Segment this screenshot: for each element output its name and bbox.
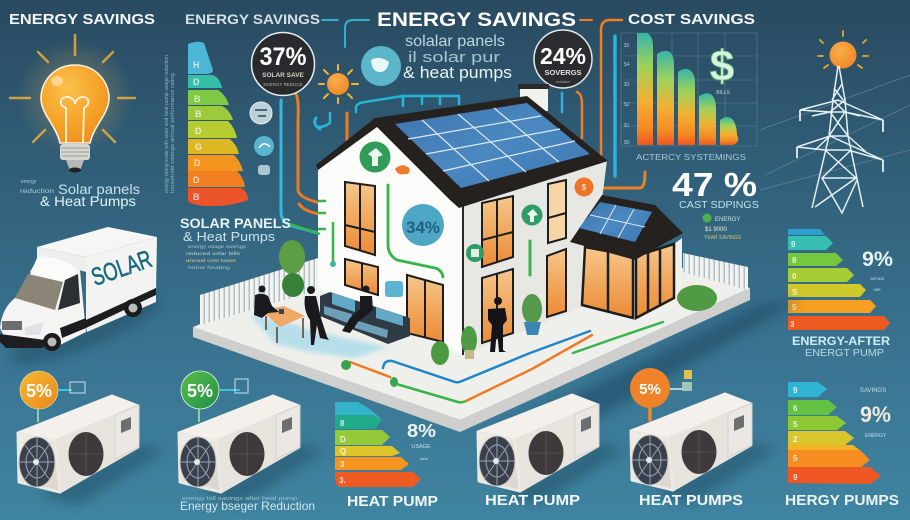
chart: energy pyramid left: D — [193, 175, 200, 185]
callout: 37 percent: 37% — [260, 43, 306, 71]
chart: heat pump rating: 3 — [340, 460, 345, 469]
icon: solar van — [0, 227, 166, 377]
chart: heat pump rating: Q — [340, 447, 346, 456]
callout: 9 percent right: annual — [870, 276, 884, 281]
chart: energy pyramid left: B — [194, 94, 201, 104]
text: solar panels and heat pumps left: & Heat Pumps — [40, 193, 136, 209]
chart: heat pump rating — [335, 402, 421, 487]
callout: 5 percent orange right: 5% — [639, 381, 661, 398]
text: solar panels heading middle: reduced solar bills — [186, 251, 241, 256]
chimney — [518, 84, 549, 111]
icon: light bulb — [10, 35, 135, 172]
callout: 9 percent lower right — [860, 388, 891, 439]
text: solar panels heading middle: SOLAR PANELS — [180, 215, 291, 231]
heading: hergy pumps: HERGY PUMPS — [785, 492, 899, 509]
text: solar panels and heat pumps left: energy — [21, 179, 37, 185]
chart: energy pyramid left: D — [194, 158, 201, 168]
callout: 9 percent right: use — [873, 287, 881, 292]
text: solar panels heading middle: energy usage savings — [188, 244, 247, 249]
callout: 47 percent cost savings: ENERGY — [715, 217, 740, 223]
icon: sun — [319, 65, 358, 103]
icon: green recycle — [360, 142, 390, 172]
icon: green badge lower — [466, 244, 484, 262]
icon: pylon with sun — [760, 31, 910, 213]
roof — [316, 96, 608, 208]
callout: 47 percent cost savings: CAST SDPINGS — [679, 200, 759, 211]
chart: energy rating lower right: 6 — [793, 404, 798, 413]
icon: teal eco circle — [361, 46, 401, 86]
windows front wall — [345, 182, 443, 342]
unit: heat pump 4 — [631, 394, 778, 503]
panel: annex conservatory — [570, 195, 683, 318]
chart: energy rating lower right: 2 — [793, 435, 798, 444]
chart: energy rating lower right: 9 — [793, 386, 798, 395]
text: energy after: ENERGY-AFTER — [792, 334, 890, 348]
chart: energy pyramid left: D — [193, 77, 200, 87]
icon: wall unit — [385, 281, 403, 297]
text: energy reduction: energy bill savings after heat pump — [182, 496, 297, 502]
vertical small text: household savings annual performance rating — [170, 73, 176, 193]
fence: left — [200, 258, 318, 325]
heading: energy savings left: ENERGY SAVINGS — [9, 11, 155, 28]
chart: energy rating lower right — [788, 382, 881, 484]
chart: energy rating bars right: 0 — [792, 272, 797, 281]
callout: 34 percent — [402, 204, 444, 246]
text: solar panels subtitle: il solar pur — [408, 49, 500, 66]
chart: cost savings bars: $ — [710, 42, 734, 91]
callout: 37 percent — [252, 32, 314, 96]
callout: 5 percent orange: 5% — [26, 381, 52, 401]
heading: energy savings main title: ENERGY SAVINGS — [377, 10, 576, 31]
unit: heat pump 2 — [179, 396, 326, 505]
callout: 47 percent cost savings: $1 9000 — [705, 227, 727, 233]
callout: 5 percent orange — [20, 371, 85, 422]
text: chart caption: ACTERCY SYSTEMINGS — [636, 153, 746, 162]
text: solar panels and heat pumps left — [20, 179, 140, 209]
text: solar panels and heat pumps left: Solar panels — [58, 181, 140, 197]
solar panels roof — [395, 103, 590, 188]
pipe: green wall — [388, 185, 443, 277]
callout: 37 percent: SOLAR SAVE — [262, 72, 305, 79]
chart: energy pyramid left: B — [195, 109, 202, 119]
unit: heat pump 3 — [478, 395, 625, 504]
chart: energy pyramid left: G — [195, 142, 202, 152]
callout: 5 percent green — [181, 371, 248, 422]
chart: cost savings bars: $2 — [624, 102, 630, 108]
text: solar panels subtitle — [403, 33, 512, 82]
pipes: floor lines — [341, 322, 663, 402]
fence: right — [683, 253, 748, 290]
pipe: green small — [528, 241, 532, 275]
heading: heat pump 1: HEAT PUMP — [347, 493, 438, 510]
text: solar panels subtitle: & heat pumps — [403, 63, 512, 82]
text: solar panels heading middle: home heating — [188, 265, 231, 270]
icon: green badge — [522, 204, 542, 226]
person: standing — [488, 297, 507, 352]
callout: 8 percent: USAGE — [411, 444, 431, 450]
chart: energy rating bars right: 5 — [792, 303, 797, 312]
text: solar panels heading middle: & Heat Pumps — [183, 229, 276, 244]
callout: 47 percent cost savings — [672, 166, 759, 241]
chart: energy rating lower right: 5 — [793, 454, 798, 463]
callout: 5 percent green: 5% — [187, 381, 213, 401]
chart: cost savings bars: $0 — [624, 140, 630, 146]
callout: 24 percent: SOVERGS — [544, 68, 582, 77]
callout: 24 percent: 24% — [540, 43, 586, 69]
chart: energy rating lower right: 5 — [793, 420, 798, 429]
people: seated group — [254, 286, 373, 345]
callout: 9 percent lower right: 9% — [860, 402, 891, 427]
chart: cost savings bars: $5 — [624, 43, 630, 49]
icons: beside pyramid — [250, 102, 274, 175]
chart: cost savings bars — [621, 33, 757, 146]
text: energy after — [792, 334, 890, 359]
icon: orange blob — [395, 165, 409, 174]
callout: 34 percent: 34% — [406, 218, 440, 237]
callout: 9 percent lower right: SAVINGS — [860, 388, 886, 394]
vertical small text — [164, 55, 176, 193]
chart: cost savings bars: $4 — [624, 62, 630, 68]
chart: cost savings bars: BILLS — [716, 90, 730, 96]
vertical small text: energy rating scale with solar and heat pump usage reduction — [164, 55, 170, 193]
text: solar panels and heat pumps left: reduction — [20, 189, 54, 195]
chart: heat pump rating: D — [340, 435, 346, 444]
heading: cost savings: COST SAVINGS — [628, 11, 755, 28]
icon: orange badge — [574, 178, 594, 196]
callout: 9 percent right — [862, 248, 893, 292]
panel: house main — [290, 84, 608, 355]
callout: 8 percent: 8% — [407, 421, 436, 441]
icon: plant left — [279, 240, 305, 297]
chart: energy rating bars right — [788, 229, 890, 330]
text: energy after: ENERGT PUMP — [805, 348, 884, 359]
heading: heat pump 2: HEAT PUMP — [485, 492, 580, 509]
chart: energy rating bars right: 9 — [791, 240, 796, 249]
chart: cost savings bars: $3 — [624, 82, 630, 88]
chart: energy pyramid left — [188, 42, 248, 206]
chart: energy rating lower right: 9 — [793, 473, 798, 482]
panel: house platform — [193, 253, 800, 440]
furniture: sofa — [320, 292, 410, 344]
callout: 47 percent cost savings: 47 % — [672, 166, 757, 203]
chart: energy pyramid left: B — [193, 192, 200, 202]
text: solar panels heading middle: annual cost lower — [186, 258, 237, 263]
callout: 37 percent: ENERGY REDUCE — [263, 82, 303, 87]
chart: energy pyramid left: D — [195, 126, 202, 136]
text: solar panels heading middle — [180, 215, 291, 270]
callout: 9 percent right: 9% — [862, 248, 893, 271]
icon: solar van: SOLAR — [88, 245, 156, 292]
chart: energy rating bars right: S — [792, 288, 798, 297]
chart: energy pyramid left: H — [193, 60, 200, 70]
unit: heat pump 1 — [18, 396, 165, 505]
furniture: table — [262, 306, 305, 343]
callout: 47 percent cost savings: YEAR SAVINGS — [704, 235, 742, 241]
chart: heat pump rating: 8 — [340, 419, 345, 428]
callout: 8 percent: save — [420, 456, 429, 461]
pipes: top left lines — [281, 20, 645, 233]
callout: 5 percent orange right — [630, 368, 692, 420]
chart: energy rating bars right: 3 — [790, 320, 795, 329]
callout: 9 percent lower right: ENERGY — [865, 433, 887, 439]
pipe: green left — [290, 201, 336, 267]
chart: energy rating bars right: 8 — [792, 256, 797, 265]
callout: 24 percent — [534, 30, 592, 88]
heading: heat pumps: HEAT PUMPS — [639, 492, 743, 509]
plants: terrace — [431, 285, 717, 365]
icon: orange badge: $ — [582, 183, 587, 192]
chart: heat pump rating: 3. — [339, 476, 346, 485]
text: energy reduction: Energy bseger Reduction — [180, 499, 315, 513]
chart: cost savings bars: $1 — [624, 123, 630, 129]
windows right wall — [482, 180, 566, 343]
heading: energy savings second: ENERGY SAVINGS — [185, 11, 320, 27]
text: solar panels subtitle: solalar panels — [405, 33, 505, 50]
callout: 8 percent — [407, 421, 436, 461]
callout: 24 percent: reduction — [556, 80, 570, 84]
